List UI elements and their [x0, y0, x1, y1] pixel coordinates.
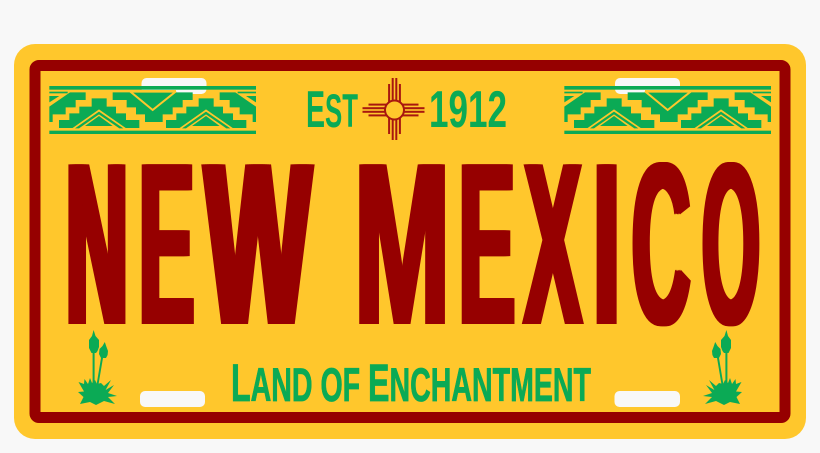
plate border [35, 66, 785, 418]
established text: EST: EST [306, 81, 358, 139]
headline: NEW MEXICO: W [205, 115, 311, 374]
headline: NEW MEXICO: I [595, 115, 618, 374]
headline: NEW MEXICO: M [354, 115, 451, 374]
headline: NEW MEXICO: E [139, 115, 194, 374]
headline: NEW MEXICO: N [66, 115, 128, 374]
headline: NEW MEXICO: E [458, 115, 514, 374]
established year: 1912: 1912 [429, 81, 507, 139]
icon: zia sun symbol [362, 78, 424, 140]
headline: NEW MEXICO: O [702, 115, 760, 374]
headline: NEW MEXICO [66, 115, 760, 374]
mounting holes [140, 78, 680, 407]
icon: left yucca plant [78, 330, 117, 405]
motto: Land of Enchantment: LAND OF ENCHANTMENT [231, 354, 591, 413]
decorative band: right [564, 86, 771, 134]
decorative band: left [49, 86, 256, 134]
headline: NEW MEXICO: C [632, 115, 690, 374]
headline: NEW MEXICO: X [524, 115, 582, 374]
icon: right yucca plant [703, 330, 742, 405]
